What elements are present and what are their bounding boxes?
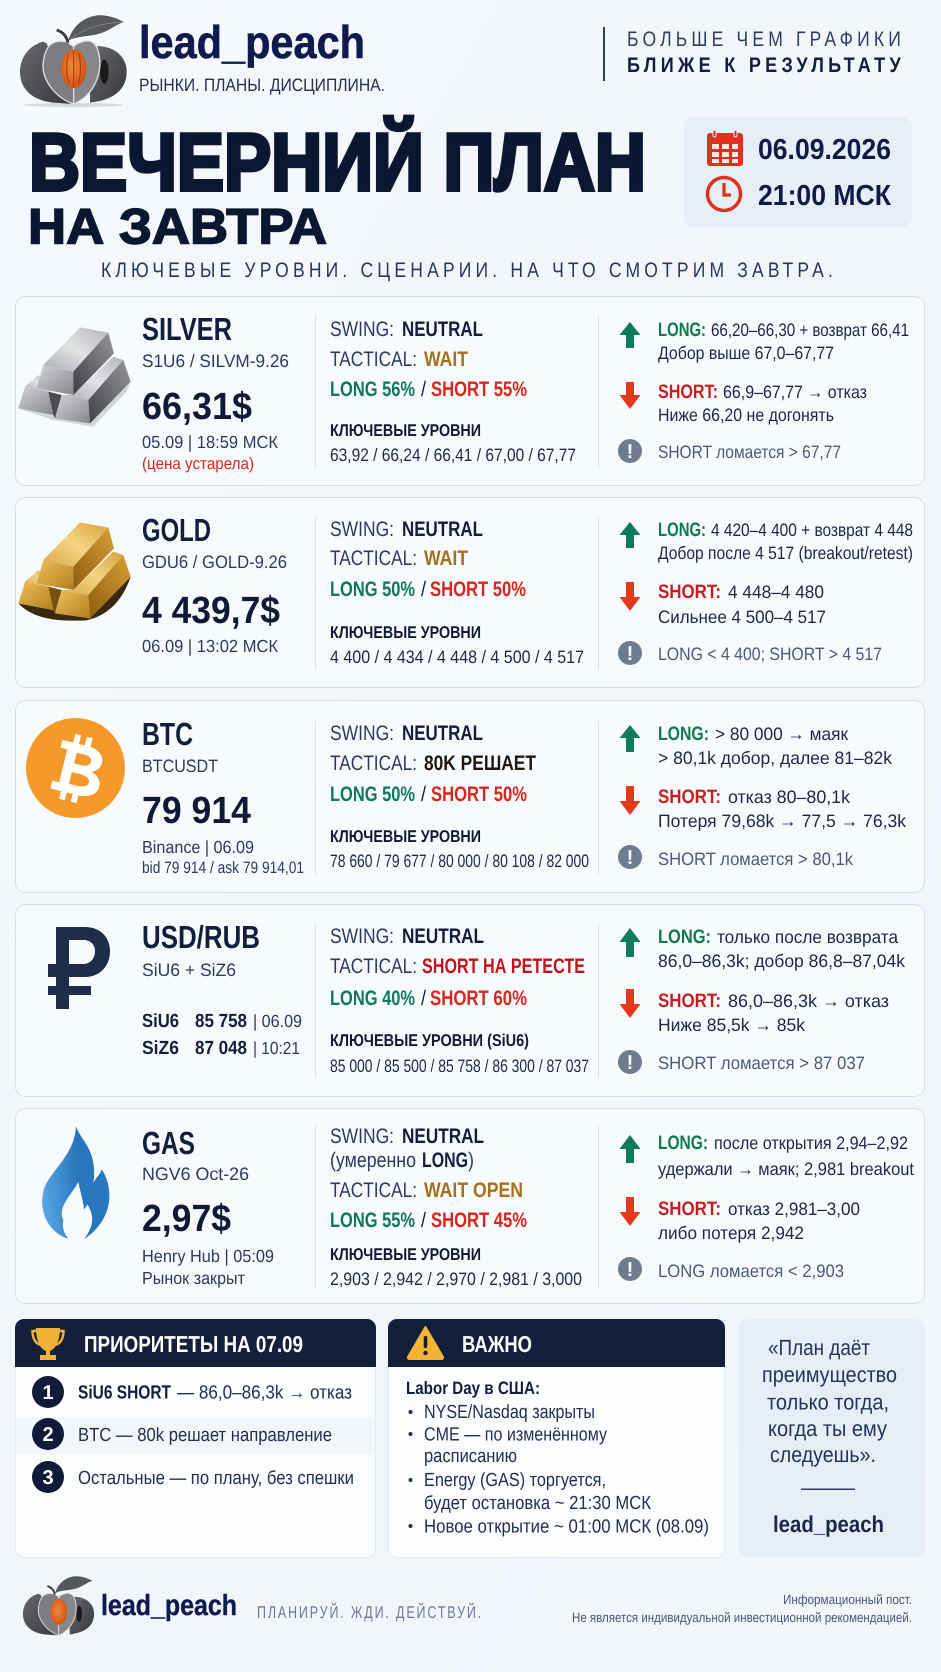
swing: SWING: (330, 1125, 394, 1148)
swing: NEUTRAL (402, 722, 483, 745)
long short split: LONG 40% (330, 987, 415, 1010)
long scenario: удержали → маяк; 2,981 breakout (658, 1159, 914, 1179)
priority 1: SiU6 SHORT (78, 1382, 171, 1404)
swing (330, 1125, 484, 1172)
long short split (330, 378, 527, 401)
swing: NEUTRAL (402, 1125, 484, 1148)
swing: SWING: (330, 925, 394, 948)
quote text: преимущество (762, 1362, 897, 1387)
tactical: TACTICAL: (330, 955, 417, 978)
bullet list: расписанию (424, 1446, 517, 1467)
panel: gas (16, 1108, 924, 1304)
long short split (330, 783, 527, 806)
key levels heading: КЛЮЧЕВЫЕ УРОВНИ (330, 623, 481, 642)
long scenario: 66,20–66,30 + возврат 66,41 (711, 320, 909, 340)
panel: gold (16, 498, 924, 688)
short scenario: отказ 2,981–3,00 (728, 1199, 860, 1219)
short scenario (658, 581, 826, 627)
quote text: «План даёт (768, 1335, 870, 1360)
long short split (330, 1209, 527, 1232)
long scenario: только после возврата (717, 927, 899, 947)
long short split: SHORT 50% (431, 783, 527, 806)
tactical: TACTICAL: (330, 547, 417, 570)
icon: flame (42, 1126, 109, 1239)
swing: SWING: (330, 318, 394, 341)
panel: priorities (15, 1319, 376, 1558)
short scenario (658, 381, 867, 425)
swing (330, 722, 483, 745)
icon: alert (618, 1050, 642, 1074)
short scenario (658, 786, 907, 831)
heading: ВАЖНО (462, 1331, 532, 1357)
short scenario (658, 1198, 860, 1243)
icon: warning (408, 1327, 443, 1359)
short scenario: 86,0–86,3k → отказ (728, 991, 889, 1011)
stale note: (цена устарела) (142, 455, 254, 473)
icon: alert: ! (627, 847, 633, 869)
short scenario: 66,9–67,77 → отказ (723, 382, 867, 402)
short scenario: SHORT: (658, 786, 721, 808)
date: 06.09.2026 (758, 134, 891, 166)
ticker: BTCUSDT (142, 756, 218, 776)
brand name: lead_peach (139, 16, 365, 68)
long short split: SHORT 60% (430, 987, 527, 1010)
SiU6 quote: | 06.09 (253, 1011, 302, 1031)
quote text: только тогда, (767, 1390, 889, 1414)
long scenario: LONG: (658, 723, 709, 745)
quote text: следуешь». (770, 1442, 876, 1467)
SiZ6 quote: | 10:21 (253, 1038, 300, 1058)
long scenario: LONG: (658, 1132, 708, 1154)
long scenario (658, 926, 906, 971)
priority 1: — 86,0–86,3k → отказ (177, 1382, 352, 1404)
icon: bitcoin (26, 718, 125, 818)
time: 21:00 МСК (758, 180, 891, 212)
arrow up (620, 322, 640, 348)
short scenario: SHORT: (658, 1198, 721, 1220)
long scenario (658, 1132, 914, 1179)
logo: peach icon (20, 15, 127, 107)
key levels: 2,903 / 2,942 / 2,970 / 2,981 / 3,000 (330, 1269, 582, 1289)
short scenario: SHORT: (658, 990, 721, 1012)
panel: important (388, 1319, 725, 1558)
swing (330, 318, 483, 341)
priority 3: 3 (42, 1467, 54, 1489)
long short split: / (421, 578, 426, 601)
key levels heading: КЛЮЧЕВЫЕ УРОВНИ (330, 421, 481, 440)
bullet list: NYSE/Nasdaq закрыты (424, 1402, 595, 1423)
price: 2,97$ (142, 1198, 231, 1240)
footer logo: peach icon (23, 1576, 94, 1635)
name: BTC (142, 716, 193, 752)
short scenario: Потеря 79,68k → 77,5 → 76,3k (658, 811, 907, 831)
priority 3: Остальные — по плану, без спешки (78, 1468, 354, 1489)
bullet list: CME — по изменённому (424, 1424, 607, 1446)
bullet list (408, 1402, 709, 1538)
invalidation: SHORT ломается > 67,77 (658, 442, 841, 462)
name: SILVER (142, 311, 232, 347)
invalidation: LONG < 4 400; SHORT > 4 517 (658, 644, 882, 664)
tactical (330, 752, 536, 775)
long scenario: 4 420–4 400 + возврат 4 448 (711, 520, 913, 540)
long scenario (658, 723, 893, 768)
priority 3 (32, 1461, 354, 1493)
icon: calendar (707, 130, 743, 166)
long scenario: 86,0–86,3k; добор 86,8–87,04k (658, 951, 906, 971)
long short split (330, 578, 526, 601)
quote text: когда ты ему (768, 1416, 887, 1441)
tactical (330, 955, 585, 978)
tactical (330, 1179, 523, 1202)
swing (330, 925, 484, 948)
tactical: SHORT НА РЕТЕСТЕ (422, 955, 585, 978)
icon: alert (618, 439, 642, 463)
SiZ6 quote: SiZ6 (142, 1038, 179, 1059)
long scenario: после открытия 2,94–2,92 (714, 1133, 908, 1153)
tactical: TACTICAL: (330, 752, 417, 775)
short scenario: Ниже 66,20 не догонять (658, 405, 834, 425)
tactical: WAIT OPEN (424, 1179, 523, 1202)
panel: quote (738, 1319, 925, 1558)
swing (330, 518, 483, 541)
long scenario: > 80,1k добор, далее 81–82k (658, 748, 893, 768)
short scenario: либо потеря 2,942 (658, 1223, 804, 1243)
ticker: NGV6 Oct-26 (142, 1164, 249, 1184)
SiZ6 quote: 87 048 (195, 1038, 247, 1059)
key levels: 63,92 / 66,24 / 66,41 / 67,00 / 67,77 (330, 445, 576, 465)
long scenario (658, 519, 913, 563)
icon: gold bars (18, 522, 131, 621)
long scenario: LONG: (658, 319, 706, 341)
invalidation: SHORT ломается > 80,1k (658, 849, 854, 869)
icon: alert (618, 641, 642, 665)
bullet list: Energy (GAS) торгуется, (424, 1470, 606, 1491)
icon: alert (618, 1257, 642, 1281)
arrow down (620, 989, 640, 1018)
SiZ6 quote (142, 1038, 300, 1059)
long short split: LONG 56% (330, 378, 415, 401)
swing: SWING: (330, 518, 394, 541)
quote signature: lead_peach (773, 1511, 884, 1537)
invalidation: SHORT ломается > 87 037 (658, 1053, 865, 1073)
icon: alert: ! (627, 441, 633, 463)
date box (684, 117, 912, 227)
market status: Рынок закрыт (142, 1268, 245, 1288)
tactical: TACTICAL: (330, 348, 417, 371)
key levels heading: КЛЮЧЕВЫЕ УРОВНИ (330, 1245, 481, 1264)
short scenario (658, 990, 889, 1035)
long short split (330, 987, 527, 1010)
ticker: SiU6 + SiZ6 (142, 960, 236, 980)
swing: NEUTRAL (402, 518, 483, 541)
price: 66,31$ (142, 386, 252, 428)
short scenario: отказ 80–80,1k (728, 787, 851, 807)
long short split: LONG 50% (330, 783, 415, 806)
arrow up (620, 1135, 640, 1163)
key levels heading: КЛЮЧЕВЫЕ УРОВНИ (330, 827, 481, 846)
quote text (762, 1335, 897, 1467)
bid ask: bid 79 914 / ask 79 914,01 (142, 859, 304, 877)
bullet list: Новое открытие ~ 01:00 МСК (08.09) (424, 1516, 709, 1538)
tactical: WAIT (424, 547, 468, 570)
swing: NEUTRAL (402, 925, 484, 948)
icon: trophy (32, 1328, 64, 1360)
arrow down (620, 582, 640, 611)
arrow up (620, 522, 640, 548)
icon: clock (708, 178, 740, 210)
panel: usd/rub (16, 904, 924, 1096)
date: 05.09 | 18:59 МСК (142, 432, 279, 452)
icon: alert: ! (627, 643, 633, 665)
priority 2: BTC — 80k решает направление (78, 1425, 332, 1446)
short scenario: 4 448–4 480 (728, 582, 824, 602)
ticker: S1U6 / SILVM-9.26 (142, 351, 289, 371)
tactical: 80K РЕШАЕТ (424, 752, 536, 775)
icon: alert: ! (627, 1052, 633, 1074)
ticker: GDU6 / GOLD-9.26 (142, 552, 287, 572)
title line 2: НА ЗАВТРА (28, 198, 327, 254)
name: GAS (142, 1125, 195, 1161)
footer slogan: ПЛАНИРУЙ. ЖДИ. ДЕЙСТВУЙ. (257, 1602, 483, 1622)
price: 79 914 (142, 790, 251, 832)
SiU6 quote: SiU6 (142, 1011, 179, 1032)
long short split: LONG 50% (330, 578, 415, 601)
long short split: / (421, 987, 426, 1010)
priority 1: 1 (42, 1382, 54, 1404)
invalidation: LONG ломается < 2,903 (658, 1261, 844, 1281)
short scenario: SHORT: (658, 381, 718, 403)
SiU6 quote: 85 758 (195, 1011, 247, 1032)
long short split: SHORT 55% (431, 378, 527, 401)
footer brand: lead_peach (101, 1590, 237, 1622)
heading: ПРИОРИТЕТЫ НА 07.09 (84, 1331, 303, 1357)
arrow down (620, 786, 640, 815)
key levels: 85 000 / 85 500 / 85 758 / 86 300 / 87 037 (330, 1056, 589, 1076)
short scenario: SHORT: (658, 581, 721, 603)
price: 4 439,7$ (142, 590, 280, 632)
arrow up (620, 725, 640, 752)
bullet list: будет остановка ~ 21:30 МСК (424, 1493, 651, 1514)
swing: NEUTRAL (402, 318, 483, 341)
long scenario: LONG: (658, 926, 711, 948)
key levels: 78 660 / 79 677 / 80 000 / 80 108 / 82 000 (330, 851, 589, 871)
long short split: / (421, 378, 426, 401)
swing: (умеренно (330, 1149, 416, 1172)
long short split: SHORT 45% (431, 1209, 527, 1232)
list heading: Labor Day в США: (406, 1378, 540, 1398)
long scenario: Добор выше 67,0–67,77 (658, 343, 834, 363)
date: 06.09 | 13:02 МСК (142, 636, 279, 656)
disclaimer line 1: Информационный пост. (783, 1592, 912, 1607)
arrow down (620, 1197, 640, 1226)
key levels heading: КЛЮЧЕВЫЕ УРОВНИ (SiU6) (330, 1031, 529, 1050)
icon: silver bars (18, 327, 131, 427)
long short split: LONG 55% (330, 1209, 415, 1232)
priority 1 (32, 1376, 352, 1408)
long short split: SHORT 50% (430, 578, 526, 601)
panel: silver (16, 296, 924, 486)
icon: ruble (48, 927, 110, 1009)
swing: ) (468, 1149, 474, 1172)
key levels: 4 400 / 4 434 / 4 448 / 4 500 / 4 517 (330, 647, 584, 667)
arrow down (620, 382, 640, 409)
panel: btc (16, 700, 924, 892)
title: ВЕЧЕРНИЙ ПЛАН (29, 116, 646, 208)
short scenario: Ниже 85,5k → 85k (658, 1015, 806, 1035)
long short split: / (421, 1209, 426, 1232)
tactical: WAIT (424, 348, 468, 371)
icon: alert (618, 845, 642, 869)
icon: alert: ! (627, 1259, 633, 1281)
swing: LONG (422, 1149, 468, 1172)
long scenario: > 80 000 → маяк (715, 724, 848, 744)
brand tagline: РЫНКИ. ПЛАНЫ. ДИСЦИПЛИНА. (139, 75, 385, 95)
source: Henry Hub | 05:09 (142, 1246, 274, 1266)
SiU6 quote (142, 1011, 302, 1032)
long scenario: LONG: (658, 519, 706, 541)
long scenario (658, 319, 909, 363)
name: USD/RUB (142, 919, 260, 955)
long short split: / (421, 783, 426, 806)
priority 2 (32, 1418, 332, 1450)
priority 2: 2 (42, 1424, 54, 1446)
short scenario: Сильнее 4 500–4 517 (658, 607, 826, 627)
swing: SWING: (330, 722, 394, 745)
name: GOLD (142, 512, 211, 548)
tactical: TACTICAL: (330, 1179, 417, 1202)
source: Binance | 06.09 (142, 837, 254, 857)
arrow up (620, 928, 640, 957)
